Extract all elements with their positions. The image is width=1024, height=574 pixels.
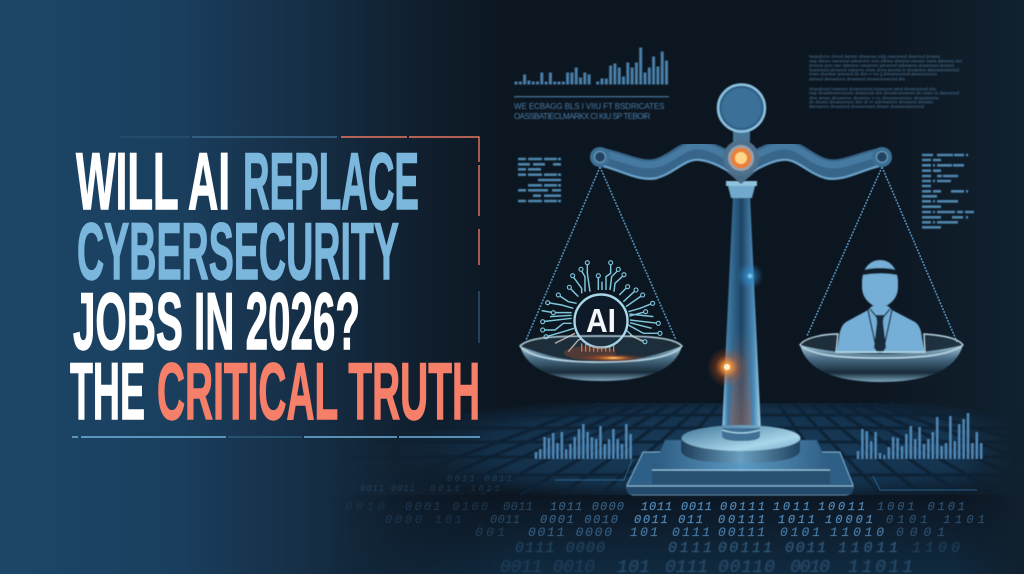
right code dashes: [922, 155, 974, 227]
left pan bowl: [520, 336, 682, 381]
title heading: [70, 137, 480, 437]
binary code rows: 10011: [818, 500, 865, 514]
right tiny text block: nwp dwnvs nwnsnnd wdnsnvnn nvrs ddnsw dnwsnd nwsnsn nvws ddnsnvs nsn: [809, 58, 963, 64]
binary code rows: 0011: [785, 540, 826, 557]
binary code rows: 0000 101: [385, 513, 462, 527]
icon: AI circuit chip: [541, 261, 662, 352]
binary code rows: 00111: [718, 540, 772, 557]
top chart caption: WE ECBAGG BLS I VIIU FT BSDRICATES: [514, 102, 665, 111]
right tiny text block: dwnvwnnv dnvwsnnd dnvwsnvwsn dnvwn dnvwsnvwsnvnnd: [809, 104, 925, 109]
binary code rows: 0010: [345, 500, 385, 514]
icon: human professional silhouette: [836, 260, 925, 354]
binary code rows: 0011: [503, 500, 533, 514]
binary code rows: 1011: [778, 513, 815, 527]
scale: stand pillar: [722, 181, 761, 432]
binary code rows: 0101 1101: [886, 513, 985, 527]
top bar chart: [516, 48, 666, 84]
top chart caption: [514, 97, 669, 121]
binary code rows: 0111 0000: [515, 540, 605, 557]
left code dashes: [518, 159, 561, 201]
binary code rows: 101: [630, 525, 658, 540]
binary code rows: 1011 0000: [550, 500, 624, 514]
binary code rows: 0001 0100: [405, 500, 488, 514]
binary code rows: 0101: [780, 525, 820, 540]
scale: stepped base: [627, 425, 853, 495]
right tiny text block: Nvasnnwd jdnvsnnd wwrsnnv dnws drvvs jwnvsd rn dnvwnsnn dwnvwsnnwnsvd: [809, 67, 960, 72]
binary code rows: 1001 0101: [877, 500, 965, 514]
icon: AI circuit chip: AI: [586, 302, 616, 339]
binary code rows: [345, 474, 985, 574]
title frame top and right lines: [120, 137, 479, 343]
binary code rows: 1011: [773, 500, 810, 514]
binary code rows: 00111: [718, 525, 765, 540]
scale: right beam arm: [752, 146, 892, 179]
right pan chains: [807, 167, 957, 342]
perspective data grid floor: [416, 402, 1003, 574]
binary code rows: 11010: [830, 525, 884, 540]
left pan chains: [526, 167, 676, 340]
binary code rows: 00111: [718, 513, 765, 527]
binary code rows: 001: [475, 525, 505, 540]
lower left bar chart: [536, 424, 631, 459]
right tiny text block: Nvasdcrnn zrtvvd dwrtrtn drtwsnsa nrtdj owvnsnnd dnwrnvd drvwna: [809, 54, 941, 59]
title heading: REPLACE: [243, 137, 419, 227]
right pan bowl: [800, 334, 963, 382]
right tiny text block: dn dnvwn dnvwsnvsnn dnn dr rn wdnvwsnvn dnvwsnn dnvwsn: [809, 100, 934, 105]
right tiny text block: Nvasdnvsd nvwnsnv dnvwsnvnnd nvwsnnvn jwnd dnvwnsnnvd dnn: [809, 86, 937, 91]
lower right bar chart: [858, 413, 981, 459]
binary code rows: 0001 0010: [540, 513, 618, 527]
binary code rows: 0011 0011: [360, 484, 415, 494]
binary code rows: 10001: [825, 513, 873, 527]
right tiny text block: dwnsvd dwnvwnsvs dnvwsnnd dnvwsnsnvwnnd dnv: [809, 76, 906, 81]
binary code rows: 11011: [838, 540, 898, 557]
binary code rows: 0111: [668, 540, 712, 557]
binary code rows: 0011 0011: [447, 474, 512, 484]
right tiny text block: nvwn dnsvwsr jvwnsnd dn dnn rr rnv jj dnvwnsvnsnd dwnvnsnsvnn: [809, 72, 938, 77]
right tiny text block: dnv wnsv dnvwsnn dnwsnv n rn dnvwsnvnnsv dnvwsnvnn: [809, 95, 940, 100]
orange lens flare: [707, 347, 747, 387]
title underline segments: [72, 436, 480, 438]
binary code rows: 0111: [672, 525, 710, 540]
right tiny text block: [809, 54, 963, 109]
title heading: CYBERSECURITY: [77, 207, 399, 297]
scale: top circle, neck and glowing orb: [718, 84, 765, 184]
title heading: WILL AI: [76, 137, 230, 227]
title heading: THE: [70, 347, 145, 437]
binary code rows: 00111: [720, 500, 765, 514]
title heading: JOBS IN 2026?: [73, 277, 360, 367]
binary code rows: 0011 0000: [528, 525, 612, 540]
binary code rows: 0011 1011: [430, 484, 500, 494]
binary code rows: 1011 0011: [641, 500, 712, 514]
binary code rows: 0001: [896, 525, 945, 540]
binary code rows: 1100: [912, 540, 960, 557]
circuit frame lines on floor: [555, 460, 977, 490]
binary code rows: 0011 011: [634, 513, 703, 527]
right tiny text block: dnvsnsr prnv nwn ddwnsnn nwnwrsnn jwnvsnnd wdnnwnsv dnvwnnsvs dnvwsn: [809, 63, 955, 68]
binary code rows: 0011: [490, 513, 520, 527]
right tiny text block: nwp dnvwdnvsnnsvnnn dnwsnvsd dnv dnvwsnsnvwnnv dn nvwn nv dwnvsnnd: [809, 91, 960, 96]
blue lens flare on pillar: [737, 263, 763, 289]
top chart caption: OASSBATIECLMARKX CI KIU SP TEBOIR: [514, 112, 651, 121]
text: CRITICAL TRUTH: [157, 347, 480, 437]
scale: left beam arm: [590, 146, 730, 179]
